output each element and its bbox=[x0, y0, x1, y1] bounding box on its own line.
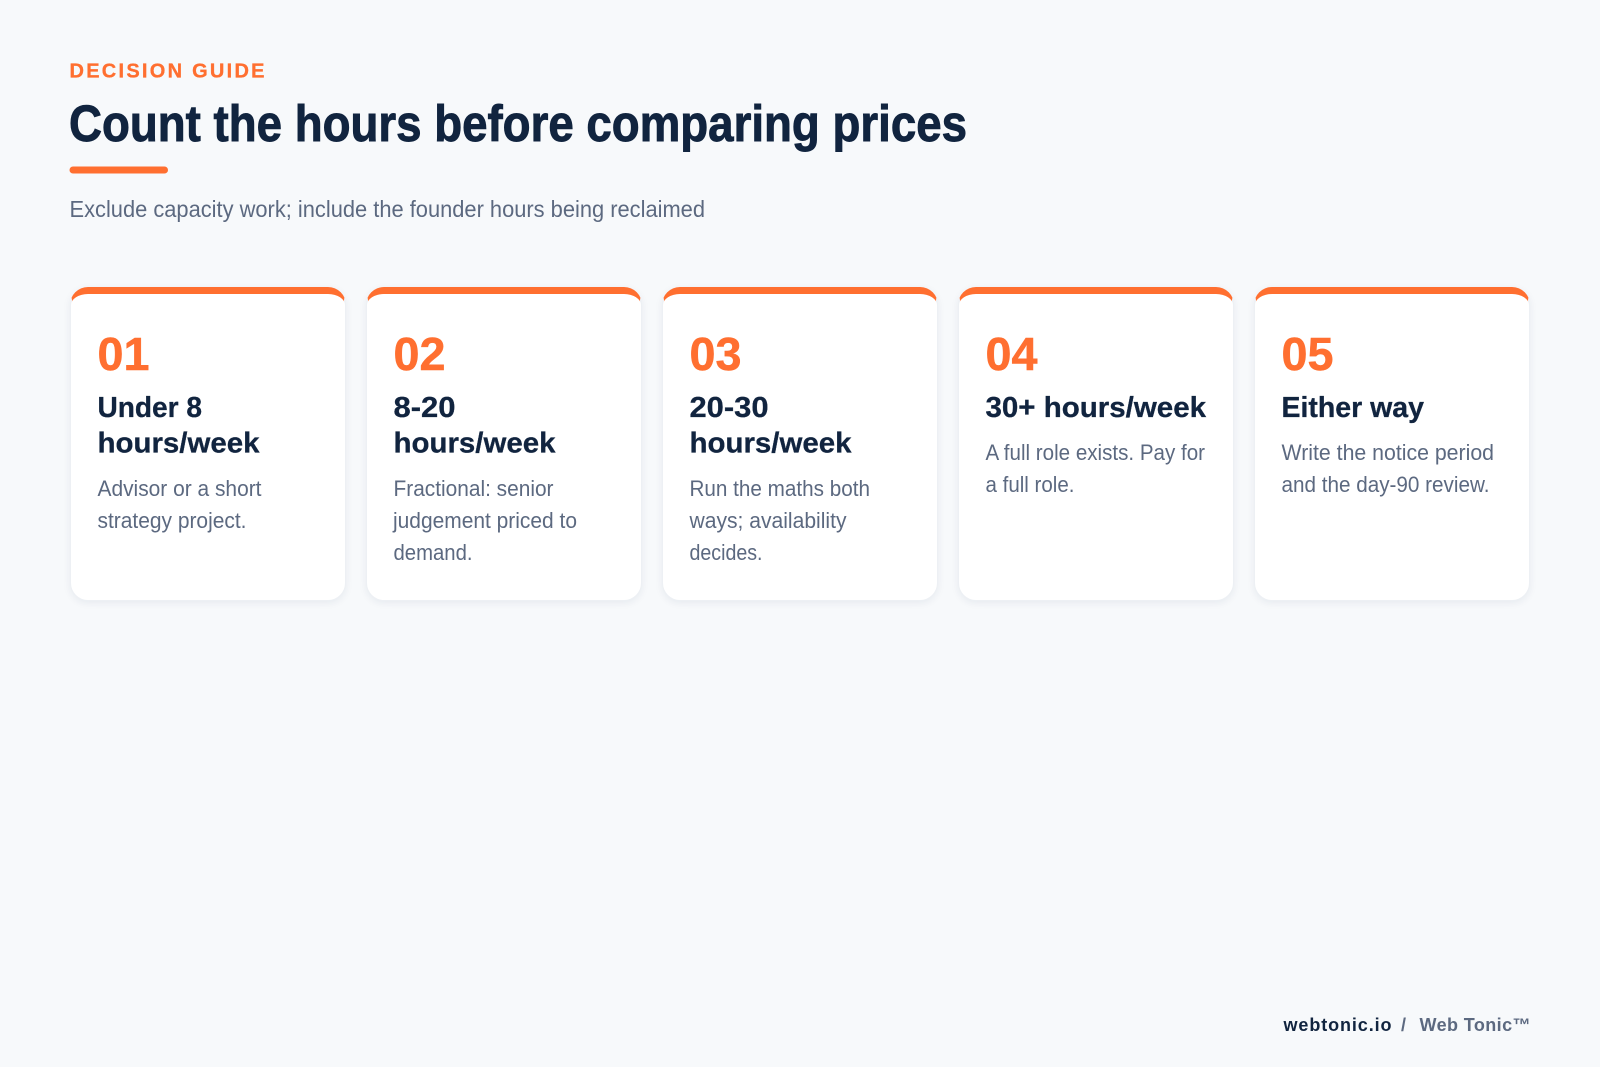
heading: hours/week bbox=[394, 428, 556, 460]
subtitle: Exclude capacity work; include the founder hours being reclaimed bbox=[70, 196, 705, 222]
description: Advisor or a short bbox=[98, 476, 262, 501]
description bbox=[986, 440, 1205, 497]
heading: 20-30 bbox=[690, 392, 768, 424]
panel: card 04 30+ hours/week bbox=[958, 287, 1234, 601]
description: Run the maths both bbox=[690, 476, 870, 501]
description: A full role exists. Pay for bbox=[986, 440, 1205, 465]
heading bbox=[690, 392, 852, 460]
heading bbox=[394, 392, 556, 460]
panel: card 01 under 8 hours/week bbox=[70, 287, 346, 601]
description: and the day-90 review. bbox=[1282, 472, 1490, 497]
heading: hours/week bbox=[98, 428, 260, 460]
heading: hours/week bbox=[690, 428, 852, 460]
description: Fractional: senior bbox=[394, 476, 554, 501]
number 05: 05 bbox=[1282, 328, 1334, 380]
description: ways; availability bbox=[689, 508, 847, 533]
number 02: 02 bbox=[394, 328, 446, 380]
description: decides. bbox=[690, 540, 762, 565]
title: Count the hours before comparing prices bbox=[69, 95, 967, 152]
description: strategy project. bbox=[98, 508, 246, 533]
number 04: 04 bbox=[986, 328, 1038, 380]
header block bbox=[69, 60, 967, 222]
heading: Either way bbox=[1282, 392, 1424, 424]
description: judgement priced to bbox=[392, 508, 577, 533]
panel: card 03 20-30 hours/week bbox=[662, 287, 938, 601]
number 03: 03 bbox=[690, 328, 742, 380]
footer brand: webtonic.io bbox=[1282, 1015, 1392, 1035]
heading: 30+ hours/week bbox=[986, 392, 1207, 424]
description bbox=[1282, 440, 1494, 497]
description: a full role. bbox=[986, 472, 1074, 497]
description: demand. bbox=[394, 540, 472, 565]
heading: 8-20 bbox=[394, 392, 456, 424]
footer brand bbox=[1282, 1015, 1530, 1035]
panel: card 05 either way bbox=[1254, 287, 1530, 601]
title underline bbox=[70, 166, 168, 174]
footer brand: Web Tonic™ bbox=[1420, 1015, 1530, 1035]
description: Write the notice period bbox=[1282, 440, 1494, 465]
number 01: 01 bbox=[98, 328, 150, 380]
heading bbox=[98, 392, 260, 460]
description bbox=[689, 476, 870, 565]
description bbox=[392, 476, 577, 565]
description bbox=[98, 476, 262, 533]
eyebrow: decision guide: DECISION GUIDE bbox=[70, 60, 264, 82]
panel: card 02 8-20 hours/week bbox=[366, 287, 642, 601]
footer brand: / bbox=[1401, 1015, 1406, 1035]
heading: Under 8 bbox=[98, 392, 202, 424]
